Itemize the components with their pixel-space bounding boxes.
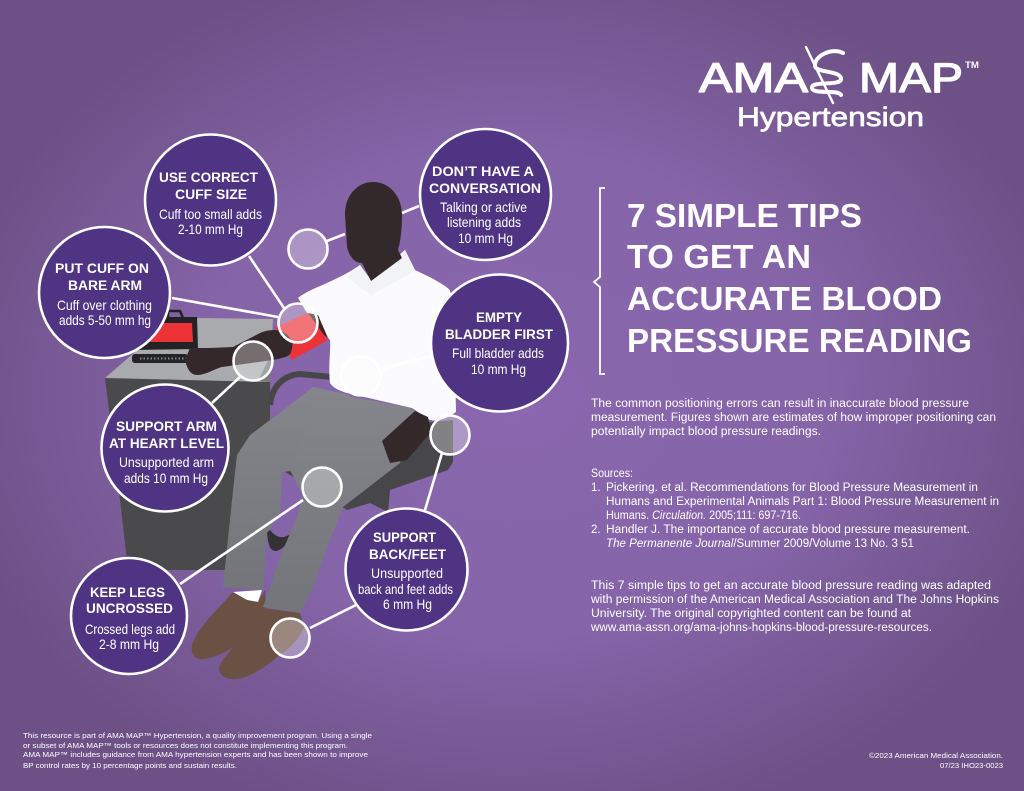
footer note: BP control rates by 10 percentage points and sustain results. bbox=[23, 761, 237, 770]
tip: put cuff on bare arm: PUT CUFF ON bbox=[55, 261, 149, 276]
tip: use correct cuff size: Cuff too small adds bbox=[159, 206, 262, 222]
sources: 1. bbox=[591, 482, 601, 494]
tip: don't have a conversation: Talking or active bbox=[440, 199, 527, 215]
tip: put cuff on bare arm bbox=[39, 227, 170, 358]
back leg bbox=[223, 387, 350, 590]
illustration: desk bbox=[105, 311, 273, 570]
desk side shadow bbox=[258, 352, 272, 382]
desk top bbox=[105, 318, 273, 382]
forearm and hand bbox=[185, 330, 292, 375]
marker: talking bbox=[288, 230, 328, 268]
marker: cuff bbox=[278, 304, 318, 342]
desk front bbox=[105, 378, 270, 570]
sources bbox=[591, 468, 999, 550]
tip: support arm at heart level bbox=[102, 384, 228, 512]
left shoe bbox=[192, 590, 266, 659]
tip: use correct cuff size bbox=[145, 134, 276, 266]
sources: Handler J. The importance of accurate blood pressure measurement. bbox=[606, 524, 970, 536]
title: ACCURATE BLOOD bbox=[627, 281, 942, 318]
tip: empty bladder first: Full bladder adds bbox=[452, 345, 544, 361]
adaptation note bbox=[590, 580, 999, 634]
title: TO GET AN bbox=[627, 239, 811, 276]
footer note: or subset of AMA MAP™ tools or resources does not constitute implementing this program. bbox=[23, 741, 348, 750]
marker: arm support bbox=[234, 342, 272, 380]
sources: 2. bbox=[591, 524, 601, 536]
tip: empty bladder first: 10 mm Hg bbox=[471, 361, 526, 377]
marker: bladder bbox=[342, 356, 380, 396]
trademark: TM bbox=[965, 60, 979, 70]
chair seat bbox=[282, 420, 453, 512]
sock bbox=[233, 590, 262, 602]
logo subtitle: Hypertension bbox=[737, 102, 924, 132]
blood pressure cuff bbox=[275, 313, 328, 360]
monitor red panel bbox=[137, 323, 193, 342]
footer note: This resource is part of AMA MAP™ Hypertension, a quality improvement program. Using a single bbox=[23, 731, 372, 740]
tip: don't have a conversation: CONVERSATION bbox=[429, 181, 541, 196]
adaptation note: www.ama-assn.org/ama-johns-hopkins-blood-pressure-resources. bbox=[590, 622, 932, 634]
tip: support back and feet: BACK/FEET bbox=[369, 547, 447, 562]
tip: keep legs uncrossed bbox=[71, 558, 187, 674]
sources: The Permanente Journal/Summer 2009/Volume 13 No. 3 51 bbox=[606, 538, 914, 550]
chair base bbox=[267, 530, 292, 551]
resting hand bbox=[382, 411, 431, 463]
intro paragraph bbox=[591, 398, 996, 438]
marker: back bbox=[430, 416, 470, 454]
tip: don't have a conversation bbox=[420, 129, 551, 260]
tip: empty bladder first bbox=[431, 274, 568, 412]
sources: Humans. Circulation. 2005;111: 697-716. bbox=[606, 510, 801, 522]
logo: AMA MAP Hypertension bbox=[699, 47, 979, 132]
logo wordmark: AMA bbox=[699, 54, 808, 101]
tip: support back and feet: back and feet adds bbox=[358, 581, 453, 597]
tip: keep legs uncrossed: KEEP LEGS bbox=[90, 585, 165, 600]
tip: keep legs uncrossed: Crossed legs add bbox=[85, 621, 175, 637]
front leg bbox=[263, 390, 415, 613]
logo: staff and serpent bbox=[806, 47, 843, 103]
sources: Humans and Experimental Animals Part 1: Blood Pressure Measurement in bbox=[606, 496, 999, 508]
intro paragraph: measurement. Figures shown are estimates of how improper positioning can bbox=[591, 412, 996, 424]
illustration: seated person bbox=[185, 182, 456, 679]
tip: put cuff on bare arm: Cuff over clothing bbox=[57, 297, 152, 313]
adaptation note: University. The original copyrighted content can be found at bbox=[591, 608, 912, 620]
title bracket bbox=[594, 188, 605, 374]
tip: support back and feet: Unsupported bbox=[371, 565, 443, 581]
shirt collar bbox=[347, 250, 415, 295]
sources: Sources: bbox=[591, 468, 633, 480]
tip: put cuff on bare arm: BARE ARM bbox=[68, 278, 142, 293]
monitor handle bbox=[168, 311, 183, 318]
chair back bbox=[270, 374, 332, 405]
illustration: chair bbox=[267, 374, 453, 551]
marker: feet bbox=[270, 618, 310, 658]
shirt bbox=[298, 250, 456, 421]
blood pressure monitor bbox=[130, 317, 198, 350]
intro paragraph: The common positioning errors can result in inaccurate blood pressure bbox=[591, 398, 969, 410]
copyright bbox=[869, 751, 1003, 770]
tip: support back and feet bbox=[346, 508, 468, 630]
tip: support arm at heart level: adds 10 mm Hg bbox=[124, 470, 208, 486]
tip: don't have a conversation: 10 mm Hg bbox=[458, 230, 513, 246]
logo wordmark MAP: MAP bbox=[859, 54, 963, 101]
connector lines bbox=[172, 206, 442, 628]
intro paragraph: potentially impact blood pressure readings. bbox=[591, 426, 821, 438]
head and neck bbox=[345, 182, 402, 281]
marker: knee bbox=[302, 468, 342, 506]
adaptation note: This 7 simple tips to get an accurate blood pressure reading was adapted bbox=[591, 580, 991, 592]
tip: don't have a conversation: DON’T HAVE A bbox=[432, 164, 534, 179]
tip: empty bladder first: EMPTY bbox=[476, 310, 522, 325]
tip: support back and feet: 6 mm Hg bbox=[383, 596, 432, 612]
title bbox=[627, 198, 972, 360]
right shoe bbox=[219, 608, 304, 679]
title: 7 SIMPLE TIPS bbox=[627, 198, 862, 235]
footer note: AMA MAP™ includes guidance from AMA hypertension experts and has been shown to improve bbox=[23, 750, 368, 759]
tip: keep legs uncrossed: UNCROSSED bbox=[86, 601, 173, 616]
upper arm bbox=[308, 313, 328, 338]
tip: empty bladder first: BLADDER FIRST bbox=[445, 327, 554, 342]
tip: use correct cuff size: CUFF SIZE bbox=[175, 187, 247, 202]
tip: use correct cuff size: USE CORRECT bbox=[159, 170, 259, 185]
tip: support back and feet: SUPPORT bbox=[373, 530, 437, 545]
tip: support arm at heart level: AT HEART LEVEL bbox=[109, 436, 224, 451]
adaptation note: with permission of the American Medical Association and The Johns Hopkins bbox=[590, 594, 999, 606]
title: PRESSURE READING bbox=[627, 323, 972, 360]
tip: support arm at heart level: Unsupported arm bbox=[119, 454, 214, 470]
copyright: ©2023 American Medical Association. bbox=[869, 751, 1003, 760]
tip: keep legs uncrossed: 2-8 mm Hg bbox=[99, 636, 159, 652]
tip: don't have a conversation: listening adds bbox=[447, 214, 521, 230]
tip: put cuff on bare arm: adds 5-50 mm hg bbox=[59, 312, 151, 328]
sources: Pickering. et al. Recommendations for Blood Pressure Measurement in bbox=[606, 482, 978, 494]
footer note bbox=[23, 731, 372, 770]
tip: support arm at heart level: SUPPORT ARM bbox=[116, 419, 217, 434]
copyright: 07/23 IHO23-0023 bbox=[940, 761, 1003, 770]
tip: use correct cuff size: 2-10 mm Hg bbox=[178, 221, 243, 237]
monitor tube bbox=[132, 354, 188, 363]
